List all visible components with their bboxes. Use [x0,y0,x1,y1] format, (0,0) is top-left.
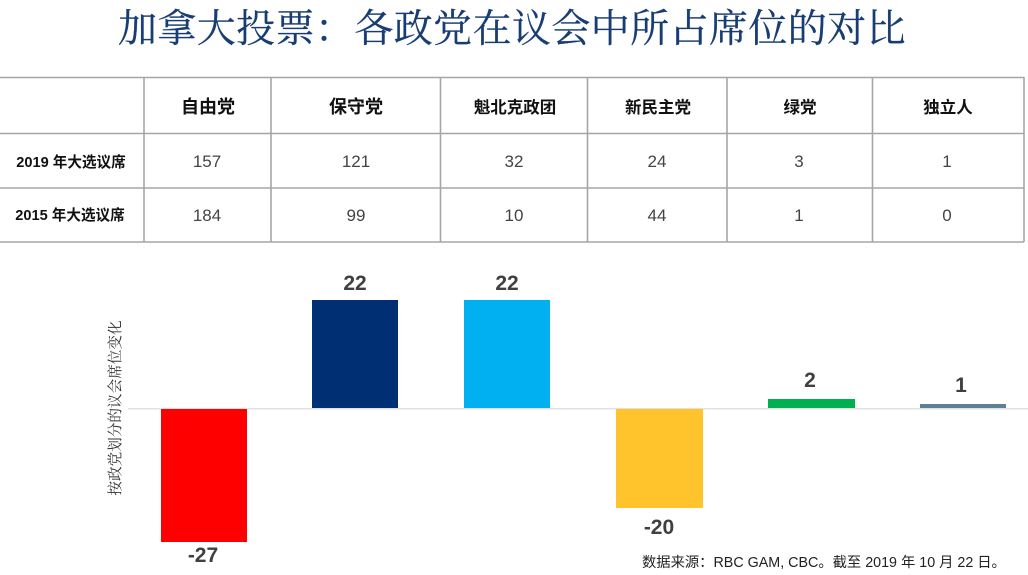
table header row [181,96,973,117]
bar: Green +2 [768,369,855,408]
bar chart: seat change by party [107,272,1028,567]
table row: 2019 election seats: 157 [193,152,221,171]
table header row: 自由党 [181,97,235,117]
bar: Independent +1: 1 [955,374,967,397]
bar: NDP -20 [616,409,703,539]
table row: 2015 election seats: 2015 年大选议席 [15,206,125,224]
table header row: 独立人 [923,97,973,117]
y-axis label: 按政党划分的议会席位变化 [107,320,124,496]
source note: 数据来源：RBC GAM, CBC。截至 2019 年 10 月 22 日。 [642,554,1006,571]
bar: Green +2: 2 [804,369,816,392]
bar: Independent +1 [920,374,1006,408]
table row: 2015 election seats: 99 [347,206,365,225]
table row: 2019 election seats [16,152,952,171]
table: seats by party [0,77,1024,242]
table row: 2019 election seats: 3 [794,152,804,171]
table row: 2019 election seats: 1 [942,152,952,171]
bar: Bloc Quebecois +22 [464,272,550,408]
bar: Liberal -27: -27 [188,544,218,567]
table row: 2015 election seats: 0 [942,206,952,225]
table row: 2015 election seats: 184 [193,206,221,225]
table row: 2019 election seats: 121 [342,152,370,171]
table row: 2015 election seats: 44 [648,206,666,225]
bar: Conservative +22 [312,272,398,408]
table header row: 魁北克政团 [474,97,556,117]
table header row: 保守党 [329,96,383,117]
table row: 2019 election seats: 2019 年大选议席 [16,153,126,171]
bar: Conservative +22: 22 [343,272,367,295]
table row: 2015 election seats [15,206,952,225]
table row: 2019 election seats: 32 [505,152,523,171]
bar: Bloc Quebecois +22: 22 [495,272,519,295]
table row: 2015 election seats: 1 [794,206,804,225]
table row: 2019 election seats: 24 [648,152,666,171]
table header row: 绿党 [784,97,816,117]
table header row: 新民主党 [625,97,691,117]
bar: NDP -20: -20 [644,516,674,539]
title: 加拿大投票：各政党在议会中所占席位的对比 [118,8,906,51]
bar: Liberal -27 [161,409,247,567]
table row: 2015 election seats: 10 [505,206,523,225]
